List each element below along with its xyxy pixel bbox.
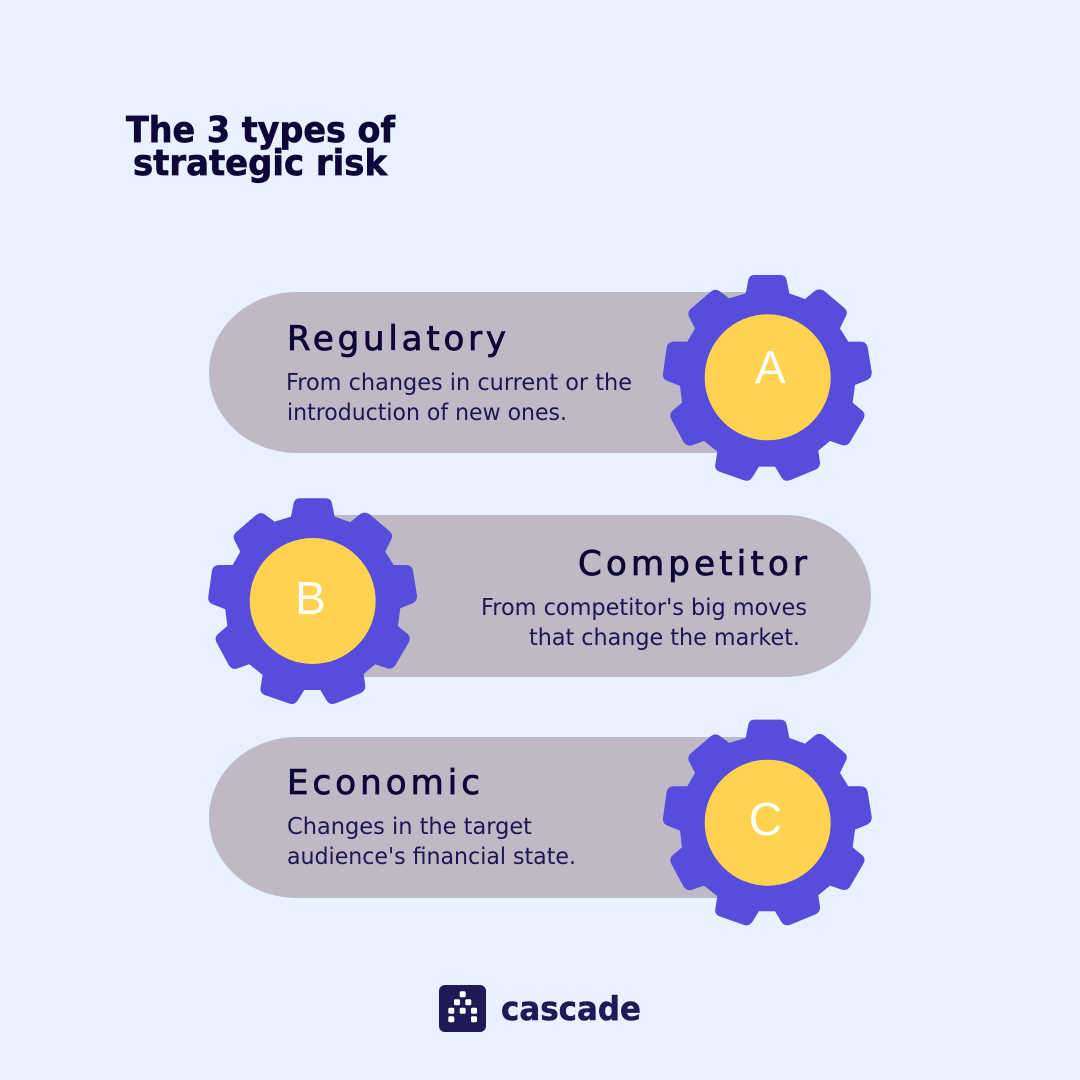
- icon: gear B: [208, 498, 417, 704]
- text: competitor description: that change the market.: [529, 625, 800, 651]
- title: The 3 types of: [126, 110, 395, 151]
- pill: economic: [209, 737, 770, 898]
- wordmark: cascade: [501, 989, 641, 1028]
- heading: regulatory: Regulatory: [287, 319, 506, 359]
- text: economic description: Changes in the target: [287, 814, 532, 840]
- pill: competitor: [320, 515, 871, 677]
- icon: gear A: [663, 275, 872, 481]
- title: [126, 110, 395, 184]
- icon: gear A: A: [755, 342, 786, 394]
- text: economic description: audience's financial state.: [287, 844, 576, 870]
- icon: gear B: B: [295, 572, 326, 624]
- icon: gear C: [663, 720, 872, 925]
- pill: regulatory: [209, 292, 770, 453]
- text: regulatory description: From changes in current or the: [286, 370, 632, 396]
- title: strategic risk: [133, 143, 388, 184]
- text: economic description: [287, 814, 576, 870]
- panel: competitor: [208, 498, 871, 704]
- icon: cascade mark: [439, 985, 486, 1032]
- heading: economic: Economic: [287, 763, 480, 803]
- panel: regulatory: [209, 275, 872, 481]
- heading: competitor: Competitor: [578, 544, 807, 584]
- icon: gear C: C: [749, 793, 782, 845]
- text: competitor description: [481, 595, 807, 651]
- logo: cascade: [439, 985, 641, 1032]
- text: competitor description: From competitor's big moves: [481, 595, 807, 621]
- text: regulatory description: introduction of new ones.: [287, 400, 567, 426]
- panel: economic: [209, 720, 872, 925]
- text: regulatory description: [286, 370, 632, 426]
